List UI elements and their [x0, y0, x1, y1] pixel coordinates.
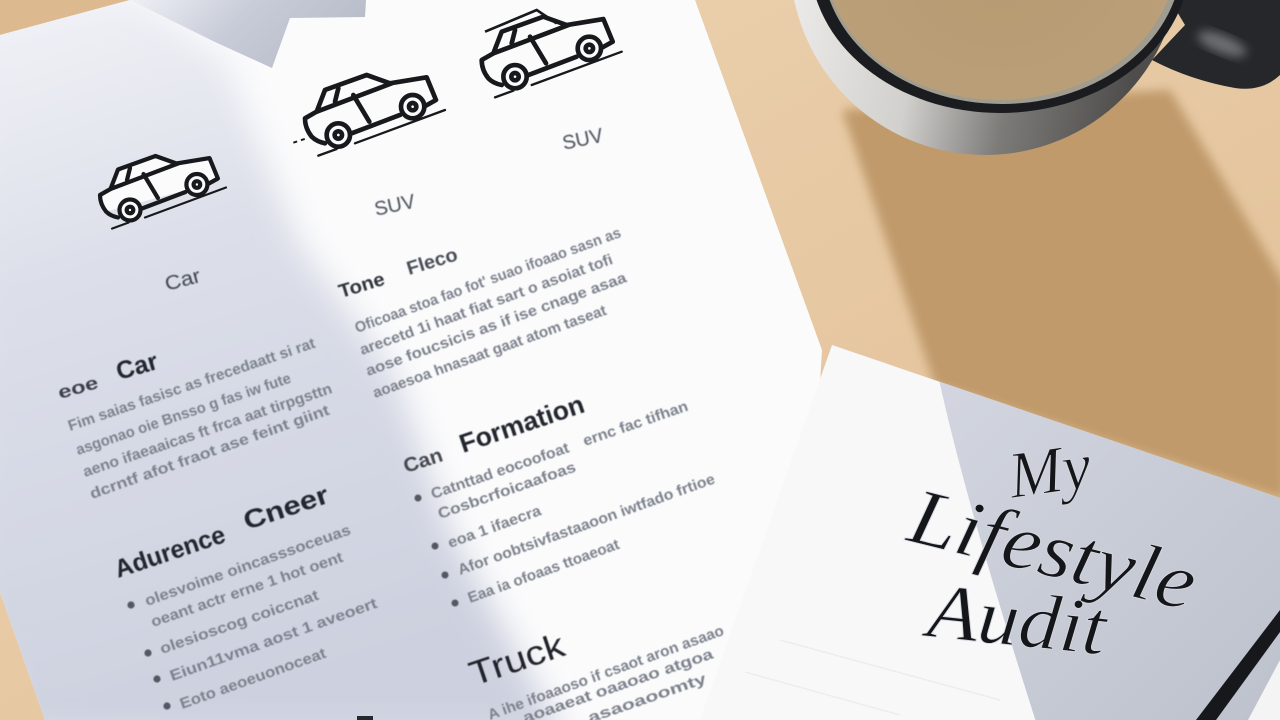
body text [353, 224, 629, 402]
heading: Tone Fleco: Fleco [404, 244, 460, 280]
body text: asgonao oie Bnsso g fas iw fute [74, 370, 293, 459]
coffee surface [824, 0, 1176, 100]
corner shaded wood [0, 0, 130, 35]
desk shadow cast by cup [842, 90, 1280, 500]
bullet list: Eoto aeoeuonoceat [178, 645, 328, 713]
icon: car three [482, 10, 622, 97]
label: SUV one: SUV [372, 191, 418, 221]
section: Can Formation [401, 389, 717, 607]
bullet list [127, 522, 380, 713]
bullet list: Eaa ia ofoaas ttoaeoat [466, 536, 622, 607]
body text: aeno ifaeaaicas ft frca aat tirpgsttn [81, 380, 334, 481]
cropped heading fragment [357, 716, 373, 720]
note card [700, 345, 1280, 720]
cup rim [810, 0, 1190, 113]
coffee cup [790, 0, 1280, 155]
body text: aose foucsicis as if ise cnage asaa [364, 269, 629, 380]
heading: Tone Fleco: Tone [336, 269, 387, 303]
icon: car two [293, 75, 445, 156]
title: Lifestyle: Lifestyle [900, 472, 1205, 628]
section: Tone Fleco [336, 224, 629, 402]
bullet list: Eiun11vma aost 1 aveoert [168, 595, 380, 685]
section: Truck [464, 622, 726, 720]
infographic sheet [0, 0, 822, 720]
icon: car one [100, 156, 226, 229]
heading: eoe Car [56, 347, 161, 403]
heading: Can Formation: Can [401, 444, 446, 478]
bullet list: Catnttad eocoofoat [429, 440, 571, 503]
bullet list: Afor oobtsivfastaaoon iwtfado frtioe [456, 471, 717, 579]
cup body [790, 0, 1180, 155]
label: SUV two: SUV [560, 125, 606, 155]
label: Car: Car [163, 265, 203, 296]
bullet list: eoa 1 ifaecra [446, 502, 544, 552]
body text: arecetd 1i haat fiat sart o asoiat tofi [358, 251, 615, 359]
bullet list: Cosbcrfoicaafoas [436, 459, 578, 523]
heading: Tone Fleco [336, 244, 460, 303]
body text: Fim saias fasisc as frecedaatt si rat [66, 335, 317, 435]
body text: dcrntf afot fraot ase feint giint [88, 402, 332, 503]
handle highlight [1195, 26, 1249, 62]
body text [66, 335, 334, 503]
section: Car text [56, 335, 334, 503]
heading: Can Formation [401, 389, 588, 478]
title: My: My [1003, 429, 1096, 513]
heading: Adurence Cneer: Cneer [239, 479, 332, 536]
rim inner glaze [822, 0, 1182, 104]
heading: Can Formation: Formation [455, 389, 588, 459]
heading: eoe Car: Car [113, 347, 161, 386]
sheet shadow area [0, 0, 565, 720]
bullet list [414, 398, 717, 607]
bullet list: olesioscog coiccnat [158, 587, 321, 658]
bullet list: olesvoime oincasssoceuas [143, 522, 353, 610]
title: Audit: Audit [919, 566, 1113, 672]
body text: aoaesoa hnasaat gaat atom taseat [371, 302, 609, 402]
section: Adurence Cneer [111, 479, 380, 713]
torn paper scrap [130, 0, 366, 68]
bullet list: oeant actr erne 1 hot oent [149, 549, 345, 631]
bullet list: ernc fac tifhan [581, 398, 690, 450]
pen [1196, 610, 1280, 720]
body text: Oficoaa stoa fao fot' suao ifoaao sasn as [353, 224, 623, 337]
faint ruled lines [745, 640, 1000, 715]
heading: Adurence Cneer [111, 479, 332, 584]
heading: Adurence Cneer: Adurence [111, 521, 229, 584]
heading: eoe Car: eoe [56, 372, 101, 403]
heading: Truck: Truck [464, 626, 571, 694]
cup handle [1152, 0, 1280, 89]
card shaded area [938, 375, 1280, 720]
